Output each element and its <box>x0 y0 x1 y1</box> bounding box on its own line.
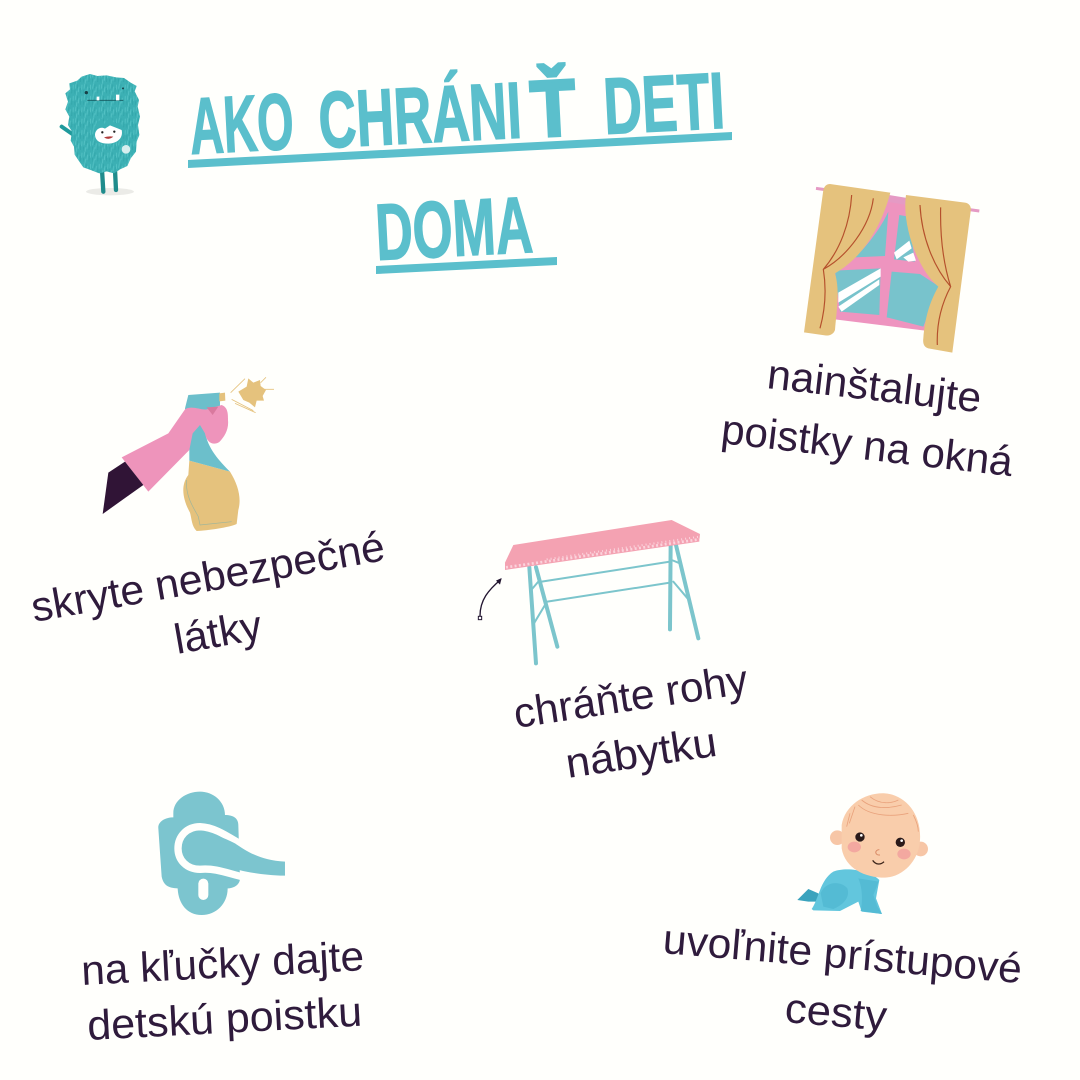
text: child lock on handles <box>80 932 365 1049</box>
text: child lock on handles: na kľučky dajte <box>80 932 365 994</box>
text: hide dangerous substances: skryte nebezpečné <box>27 522 388 631</box>
icon: hand with spray bottle <box>103 377 274 531</box>
arrow <box>478 578 502 620</box>
icon: teal monster mascot <box>62 74 140 195</box>
title underline 2 <box>376 257 557 274</box>
icon: door handle <box>158 792 285 915</box>
title line 1: CHRÁNI <box>316 66 524 165</box>
text: install window locks: nainštalujte <box>765 350 984 421</box>
icon: window with curtains <box>804 184 979 353</box>
title line 1 <box>187 56 727 171</box>
text: clear access routes: cesty <box>783 984 889 1040</box>
text: protect furniture corners: chráňte rohy <box>510 656 751 737</box>
icon: crawling baby <box>797 793 928 914</box>
text: protect furniture corners: nábytku <box>562 718 720 787</box>
title line 1: DETI <box>601 56 727 151</box>
title line 2: DOMA <box>373 180 535 277</box>
text: clear access routes <box>661 915 1024 1040</box>
title <box>187 56 732 277</box>
text: protect furniture corners <box>510 656 751 787</box>
title line 1: AKO <box>187 77 296 171</box>
text: install window locks: poistky na okná <box>719 405 1016 485</box>
text: install window locks <box>719 350 1016 485</box>
title line 1: Ť <box>528 63 578 154</box>
text: clear access routes: uvoľnite prístupové <box>661 915 1024 992</box>
text: hide dangerous substances: látky <box>170 601 265 663</box>
title underline 1 <box>188 132 732 168</box>
text: child lock on handles: detskú poistku <box>86 988 363 1049</box>
icon: table with protected corner <box>478 520 700 663</box>
